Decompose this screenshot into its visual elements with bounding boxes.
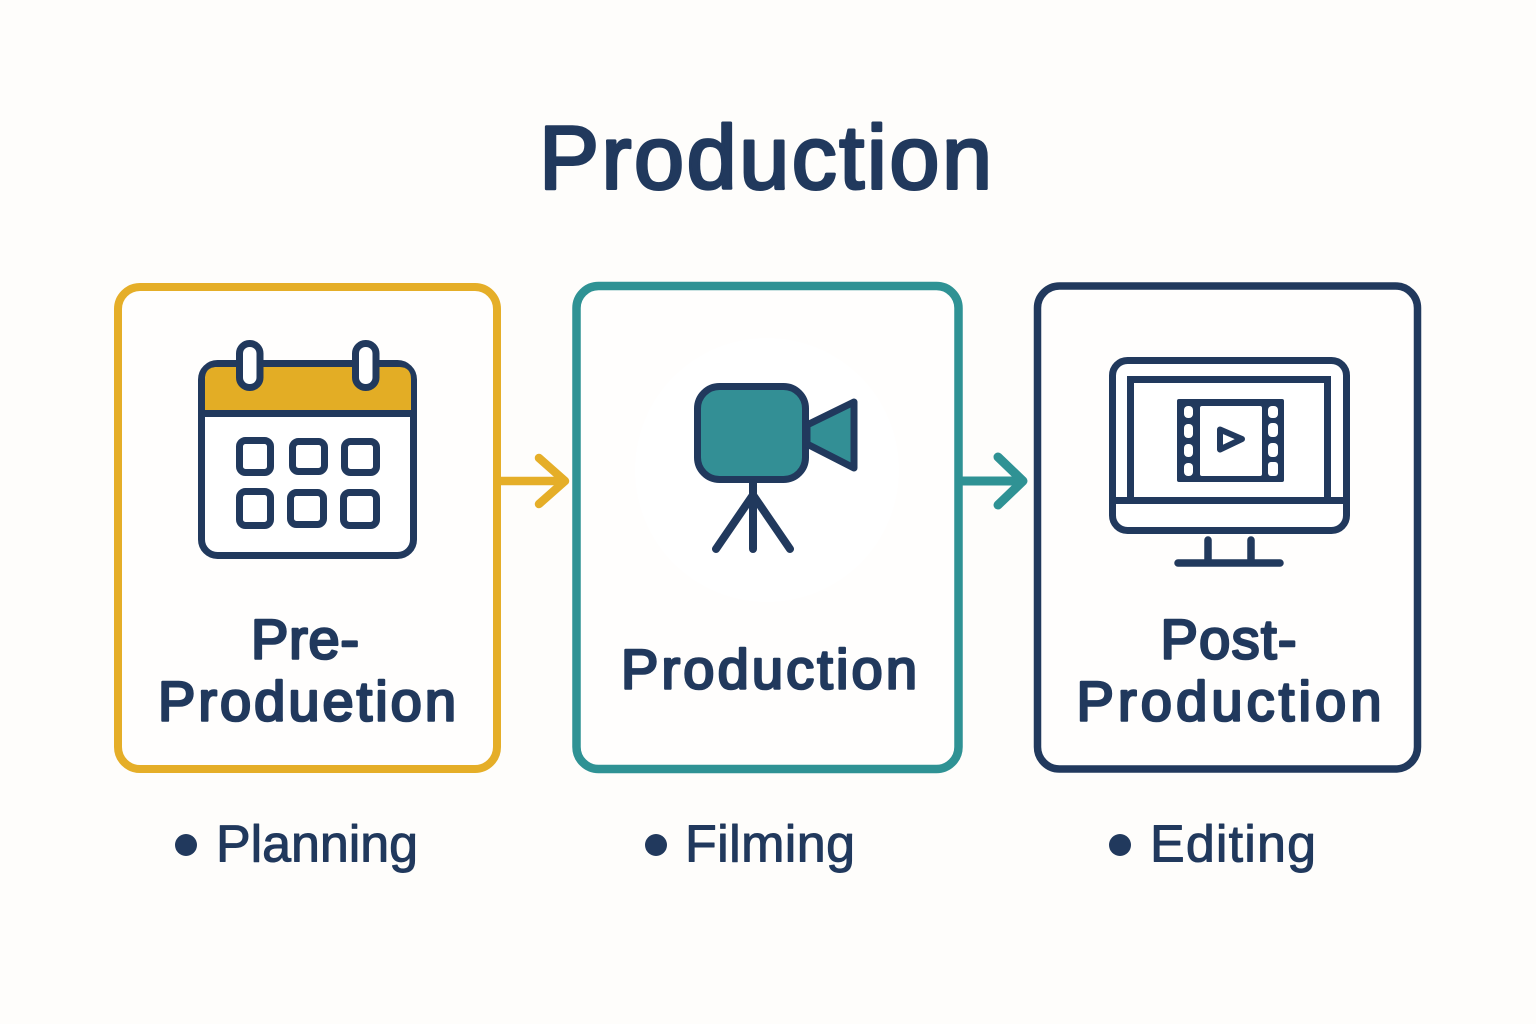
icon: video camera xyxy=(635,338,899,602)
arrow: production to post-production xyxy=(963,457,1023,505)
title: Production xyxy=(539,108,992,208)
bullet: filming: Filming xyxy=(685,816,855,874)
label: post-production: Production xyxy=(1076,670,1382,732)
panel border: production xyxy=(576,286,958,769)
label: pre-production: Produetion xyxy=(158,670,456,732)
label: post-production: Post- xyxy=(1160,608,1296,670)
label: pre-production: Pre- xyxy=(251,608,359,670)
bullet: editing: Editing xyxy=(1150,816,1316,874)
panel border: pre-production xyxy=(118,287,497,769)
icon: calendar xyxy=(202,344,414,556)
panel border: post-production xyxy=(1038,286,1418,769)
panel: production xyxy=(576,286,958,769)
arrow: pre-production to production xyxy=(501,458,565,504)
panel: post-production xyxy=(1038,286,1418,769)
icon: monitor with video xyxy=(1112,360,1346,563)
bullet: planning: Planning xyxy=(216,816,418,874)
panel: pre-production xyxy=(118,287,497,769)
label: production: Production xyxy=(621,638,917,700)
